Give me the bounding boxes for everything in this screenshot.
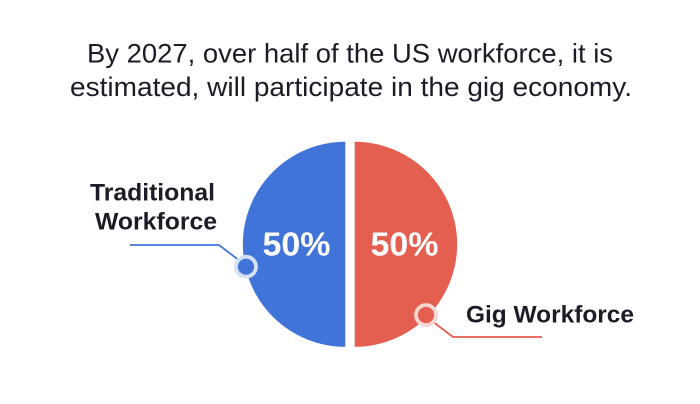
leader line: gig bbox=[432, 321, 542, 337]
title: By 2027, over half of the US workforce, it is bbox=[87, 38, 613, 68]
leader line: traditional bbox=[130, 245, 240, 261]
title bbox=[70, 38, 632, 102]
title: estimated, will participate in the gig economy. bbox=[70, 72, 632, 102]
callout: traditional workforce bbox=[90, 180, 256, 277]
pie chart bbox=[243, 142, 457, 347]
label: traditional workforce: Workforce bbox=[95, 208, 217, 236]
pie slice: traditional workforce bbox=[243, 142, 345, 347]
callout: gig workforce bbox=[416, 302, 634, 337]
label: gig workforce: Gig Workforce bbox=[466, 302, 634, 328]
marker dot: gig bbox=[416, 305, 436, 325]
label: traditional workforce: Traditional bbox=[90, 180, 215, 206]
marker dot: traditional bbox=[236, 257, 256, 277]
pie slice: gig workforce bbox=[355, 142, 457, 347]
value label: traditional 50%: 50% bbox=[262, 226, 330, 262]
value label: gig 50%: 50% bbox=[370, 226, 438, 262]
